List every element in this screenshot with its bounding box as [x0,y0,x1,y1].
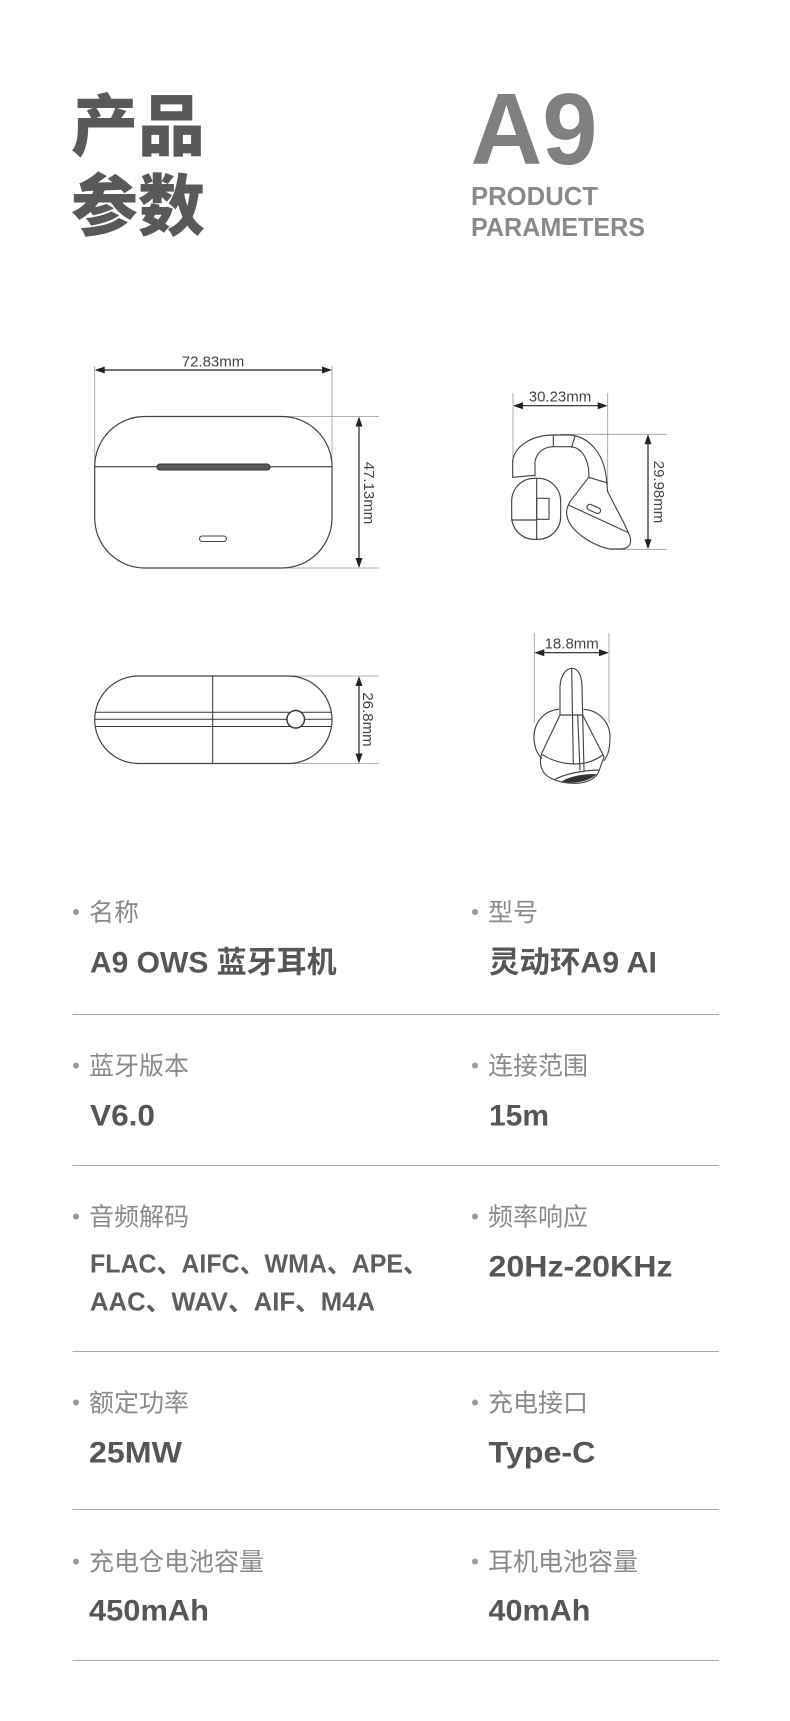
dimension: width 72.83mm: 72.83mm [182,354,244,370]
spec: 充电接口: Type-C [488,1436,596,1470]
spec: 耳机电池容量: 耳机电池容量 [488,1548,638,1576]
spec: 频率响应: 20Hz-20KHz [488,1250,672,1284]
spec: 名称: 名称 [89,899,139,927]
spec: 连接范围 [472,1052,588,1132]
dimension: height 29.98mm: 29.98mm [650,461,667,523]
spec: 充电仓电池容量: 450mAh [89,1594,209,1628]
spec: 名称: A9 OWS 蓝牙耳机 [90,946,337,980]
spec row: 名称 / 型号 [73,899,657,980]
dimension: height 47.13mm: 47.13mm [360,462,377,524]
spec: 音频解码 [73,1204,428,1316]
dimension: width 30.23mm [513,388,608,409]
heading: 产品参数 [71,90,205,245]
dimension: width 18.8mm: 18.8mm [545,636,599,652]
dimension: width 18.8mm [534,636,609,656]
spec: 名称 [73,899,337,980]
spec: 型号: 灵动环A9 AI [489,946,657,980]
spec: 充电接口 [472,1390,596,1470]
spec: 额定功率 [73,1390,189,1470]
spec: 频率响应: 频率响应 [488,1204,588,1232]
heading: 产品参数: 参数 [71,170,205,245]
spec: 连接范围: 15m [489,1100,549,1132]
heading: A9 product parameters: A9 [470,74,598,186]
dimension: width 72.83mm [95,354,332,374]
spec: 音频解码: FLAC、AIFC、WMA、APE、 [90,1248,428,1278]
heading: A9 product parameters [470,74,645,242]
diagram: earphone front view [534,633,610,783]
spec row: 额定功率 / 充电接口 [73,1390,596,1470]
spec: 蓝牙版本 [73,1052,189,1132]
spec: 音频解码: 音频解码 [89,1204,189,1232]
spec: 型号 [472,899,657,980]
diagram: earphone side view [512,388,667,549]
spec: 蓝牙版本: 蓝牙版本 [89,1052,189,1080]
diagram: charging case top view [95,676,379,764]
spec row: 蓝牙版本 / 连接范围 [73,1052,588,1132]
diagram: charging case front view [95,354,379,568]
spec row: 音频解码 / 频率响应 [73,1204,672,1316]
heading: A9 product parameters: PRODUCT [471,181,598,211]
dimension: width 30.23mm: 30.23mm [529,388,591,406]
spec: 充电接口: 充电接口 [488,1390,588,1418]
spec: 耳机电池容量 [472,1548,638,1628]
spec: 充电仓电池容量: 充电仓电池容量 [89,1548,264,1576]
spec: 额定功率: 25MW [89,1436,183,1470]
spec: 额定功率: 额定功率 [89,1390,189,1418]
spec row: 充电仓电池容量 / 耳机电池容量 [73,1548,638,1628]
spec: 音频解码: AAC、WAV、AIF、M4A [90,1286,375,1316]
heading: 产品参数: 产品 [71,90,205,165]
spec: 频率响应 [472,1204,672,1284]
dimension: height 47.13mm [356,416,377,568]
spec: 耳机电池容量: 40mAh [488,1594,590,1628]
heading: A9 product parameters: PARAMETERS [471,212,645,242]
spec: 蓝牙版本: V6.0 [90,1100,155,1132]
spec: 连接范围: 连接范围 [488,1052,588,1080]
dimension: thickness 26.8mm [356,676,376,764]
dimension: height 29.98mm [644,434,667,549]
dimension: thickness 26.8mm: 26.8mm [359,692,376,747]
spec: 型号: 型号 [488,899,538,927]
spec: 充电仓电池容量 [73,1548,264,1628]
